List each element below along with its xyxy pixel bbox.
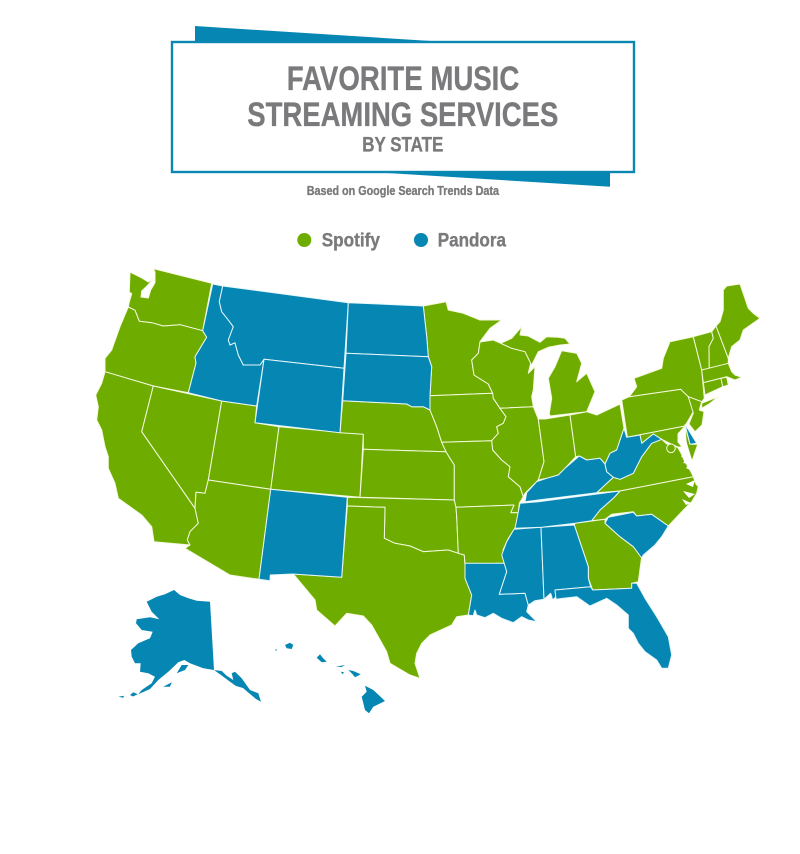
Ohio (570, 404, 624, 464)
Michigan upper peninsula (501, 327, 570, 365)
Alabama (541, 525, 591, 600)
subtitle: Based on Google Search Trends Data (307, 184, 500, 198)
Minnesota (423, 302, 502, 396)
legend swatch: Pandora (414, 233, 428, 247)
Chesapeake Bay (678, 428, 693, 471)
New Jersey (688, 397, 704, 432)
Arkansas (456, 505, 520, 564)
Aleutian island (130, 692, 138, 696)
Oklahoma (347, 497, 458, 553)
Nebraska (340, 401, 446, 452)
Illinois (492, 407, 544, 497)
Alaska panhandle (214, 670, 261, 702)
Nevada (142, 386, 222, 508)
Louisiana (465, 563, 537, 623)
Molokai (336, 665, 345, 667)
legend swatch: Spotify (297, 233, 311, 247)
Alaska and Hawaii (118, 590, 385, 713)
title banner (172, 26, 634, 187)
Missouri (442, 441, 523, 513)
Neuse River (682, 499, 691, 505)
Wyoming (255, 359, 344, 433)
Pandora states (188, 284, 697, 668)
Maryland eastern shore (685, 426, 698, 461)
banner top wedge (195, 26, 445, 42)
Iowa (430, 393, 506, 442)
New Hampshire (709, 326, 728, 369)
Maui (348, 670, 361, 677)
Pennsylvania (622, 389, 693, 437)
Michigan lower peninsula (548, 351, 595, 416)
New York (629, 337, 704, 402)
Montana (219, 286, 348, 368)
title line 2: STREAMING SERVICES (247, 96, 558, 134)
Kodiak Island (177, 665, 188, 673)
Colorado (271, 427, 363, 497)
banner bottom wedge (375, 172, 610, 187)
Alaska peninsula islet (163, 682, 172, 687)
West Virginia (605, 428, 662, 479)
Oahu (317, 654, 327, 662)
Chesapeake Bay and sounds (678, 428, 695, 505)
Washington (128, 269, 212, 331)
Utah (208, 401, 279, 489)
legend label: Spotify: Spotify (322, 230, 380, 252)
Niihau (275, 649, 277, 651)
legend label: Pandora: Pandora (438, 230, 506, 252)
Hawaii big island (362, 686, 385, 713)
North Carolina (592, 477, 698, 526)
New Mexico (259, 489, 347, 581)
Mississippi (499, 527, 544, 605)
Arizona (185, 480, 271, 579)
Spotify states (96, 269, 760, 678)
Wisconsin (472, 340, 535, 408)
Rhode Island (721, 377, 728, 387)
Maryland (627, 426, 685, 447)
Long Island (702, 397, 718, 408)
Alaska (131, 590, 214, 694)
Indiana (538, 415, 576, 480)
Kentucky (525, 456, 613, 502)
Texas (293, 506, 472, 678)
Florida (555, 583, 672, 668)
District of Columbia ring (667, 444, 675, 453)
Lanai (341, 672, 344, 674)
title line 1: FAVORITE MUSIC (287, 60, 519, 98)
Tennessee (515, 491, 620, 528)
Pamlico Sound (683, 491, 695, 498)
North Dakota (346, 303, 428, 357)
South Dakota (343, 353, 432, 410)
Georgia (574, 519, 642, 590)
South Carolina (605, 512, 668, 558)
Idaho (188, 284, 264, 406)
legend (297, 230, 506, 252)
Vermont (693, 332, 713, 370)
title line 3: BY STATE (362, 134, 443, 157)
map of US states (96, 269, 760, 713)
Aleutian island west (118, 696, 124, 698)
Virginia (597, 439, 693, 493)
Delaware (685, 424, 697, 444)
Maine (716, 284, 760, 358)
Massachusetts (702, 363, 742, 383)
Albemarle Sound (686, 480, 695, 487)
California (96, 372, 198, 545)
Connecticut (703, 378, 723, 395)
Kauai (285, 643, 293, 649)
Oregon (105, 307, 207, 393)
banner frame (172, 42, 634, 172)
Kansas (360, 449, 454, 500)
